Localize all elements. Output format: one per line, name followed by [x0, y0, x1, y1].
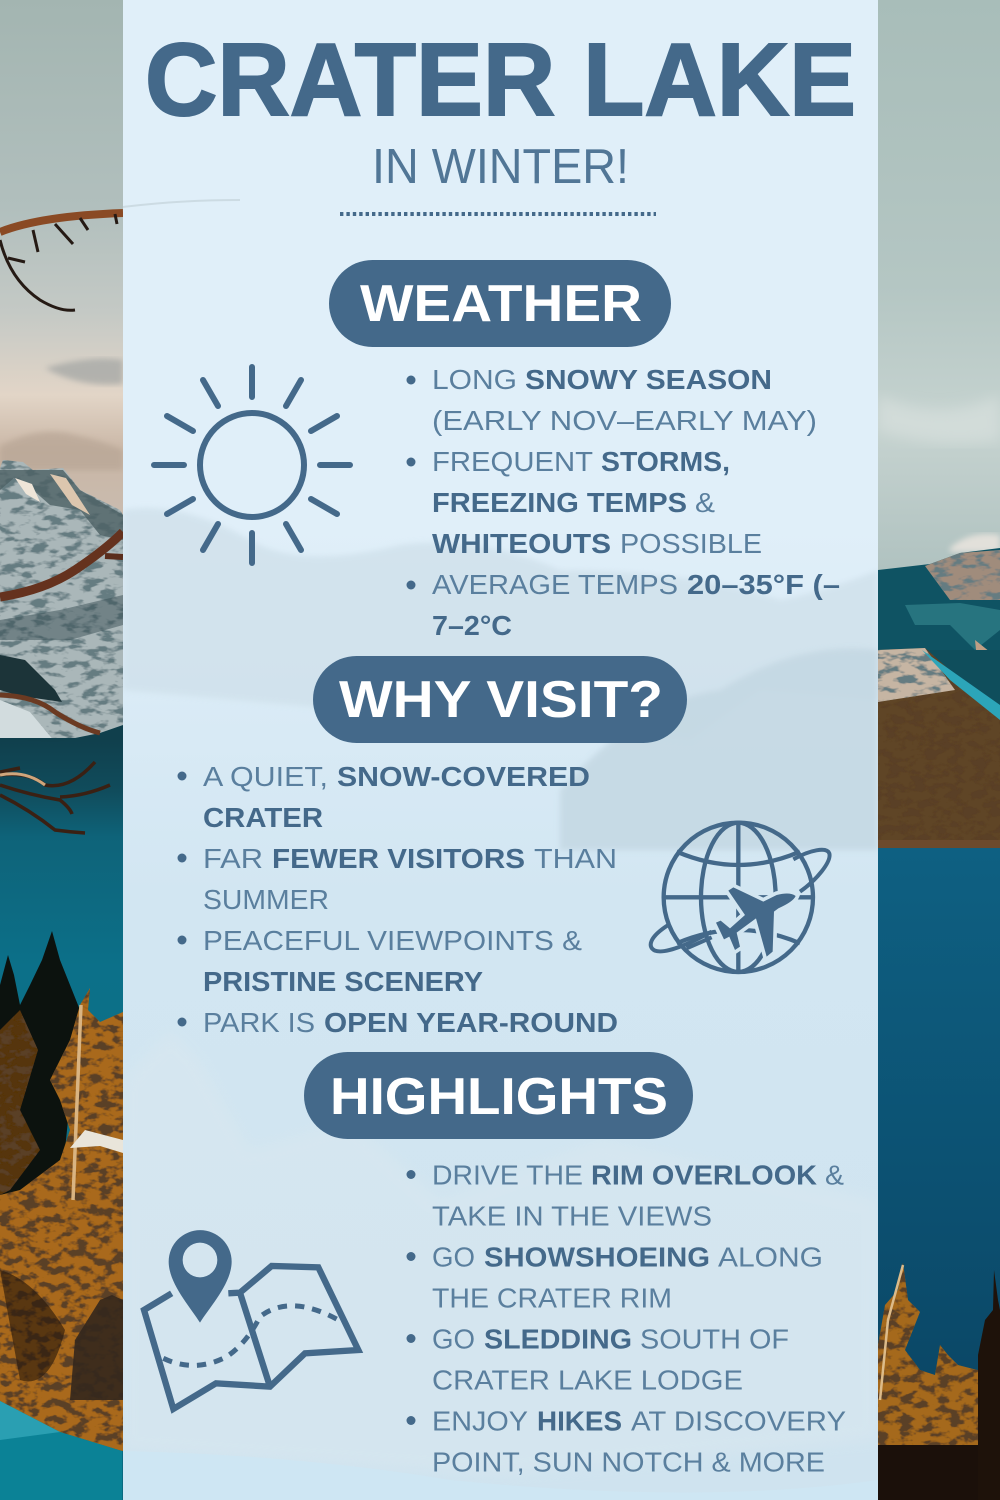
text block: weather bullets: & — [695, 487, 715, 518]
dotted divider — [340, 212, 656, 216]
text block: why visit bullets: A QUIET, — [203, 761, 328, 792]
text block: weather bullets: STORMS, — [601, 446, 730, 477]
background photo: left strip — [0, 0, 123, 1500]
text block: why visit bullets: FAR — [203, 843, 263, 874]
text block: highlights bullets: SLEDDING — [484, 1324, 632, 1354]
text block: weather bullets: FREQUENT — [432, 446, 593, 477]
text block: highlights bullets: ALONG — [718, 1242, 823, 1272]
text block: weather bullets: 20–35°F (– — [687, 569, 840, 600]
background photo: right strip — [878, 0, 1000, 1500]
subtitle: IN WINTER! — [372, 140, 629, 194]
text block: highlights bullets: & — [825, 1160, 844, 1190]
text block: highlights bullets: THE CRATER RIM — [432, 1282, 672, 1314]
text block: highlights bullets: SOUTH OF — [640, 1324, 789, 1354]
text block: highlights bullets: HIKES — [537, 1406, 622, 1436]
text block: highlights bullets: SHOWSHOEING — [484, 1242, 710, 1272]
text block: why visit bullets: PRISTINE SCENERY — [203, 966, 483, 997]
text block: highlights bullets — [406, 1160, 846, 1478]
text block: why visit bullets: SUMMER — [203, 884, 329, 915]
text block: highlights bullets: CRATER LAKE LODGE — [432, 1364, 743, 1396]
text block: why visit bullets — [178, 761, 618, 1038]
heading: highlights: HIGHLIGHTS — [330, 1068, 668, 1126]
text block: highlights bullets: TAKE IN THE VIEWS — [432, 1200, 712, 1232]
text block: why visit bullets: PEACEFUL VIEWPOINTS & — [203, 925, 582, 956]
text block: weather bullets: SNOWY SEASON — [525, 364, 772, 395]
text block: weather bullets: FREEZING TEMPS — [432, 487, 687, 518]
text block: highlights bullets: GO — [432, 1242, 475, 1272]
title: CRATER LAKE — [145, 22, 856, 137]
heading: weather — [329, 260, 671, 347]
text block: weather bullets: LONG — [432, 364, 517, 395]
text block: highlights bullets: DRIVE THE — [432, 1160, 583, 1190]
text block: weather bullets: WHITEOUTS — [432, 528, 611, 559]
translucent content panel — [123, 0, 878, 1500]
text block: why visit bullets: FEWER VISITORS — [272, 843, 525, 874]
heading: why visit — [313, 656, 687, 743]
text block: highlights bullets: GO — [432, 1324, 475, 1354]
text block: weather bullets: POSSIBLE — [620, 528, 762, 559]
heading: weather: WEATHER — [360, 275, 642, 333]
text block: highlights bullets: ENJOY — [432, 1406, 528, 1436]
text block: weather bullets: 7–2°C — [432, 610, 512, 641]
text block: highlights bullets: RIM OVERLOOK — [591, 1160, 817, 1190]
text block: weather bullets: AVERAGE TEMPS — [432, 569, 678, 600]
icon: globe with plane — [651, 823, 830, 972]
icon: sun — [154, 367, 350, 563]
heading: highlights — [304, 1052, 693, 1139]
text block: why visit bullets: SNOW-COVERED — [337, 761, 590, 792]
text block: why visit bullets: PARK IS — [203, 1007, 315, 1038]
text block: why visit bullets: OPEN YEAR-ROUND — [324, 1007, 618, 1038]
text block: why visit bullets: CRATER — [203, 802, 323, 833]
text block: weather bullets — [406, 364, 840, 641]
text block: why visit bullets: THAN — [534, 843, 617, 874]
heading: why visit: WHY VISIT? — [339, 671, 663, 729]
text block: weather bullets: (EARLY NOV–EARLY MAY) — [432, 405, 817, 436]
text block: highlights bullets: POINT, SUN NOTCH & MORE — [432, 1446, 825, 1478]
icon: map with location pin — [144, 1230, 358, 1409]
text block: highlights bullets: AT DISCOVERY — [631, 1406, 846, 1436]
